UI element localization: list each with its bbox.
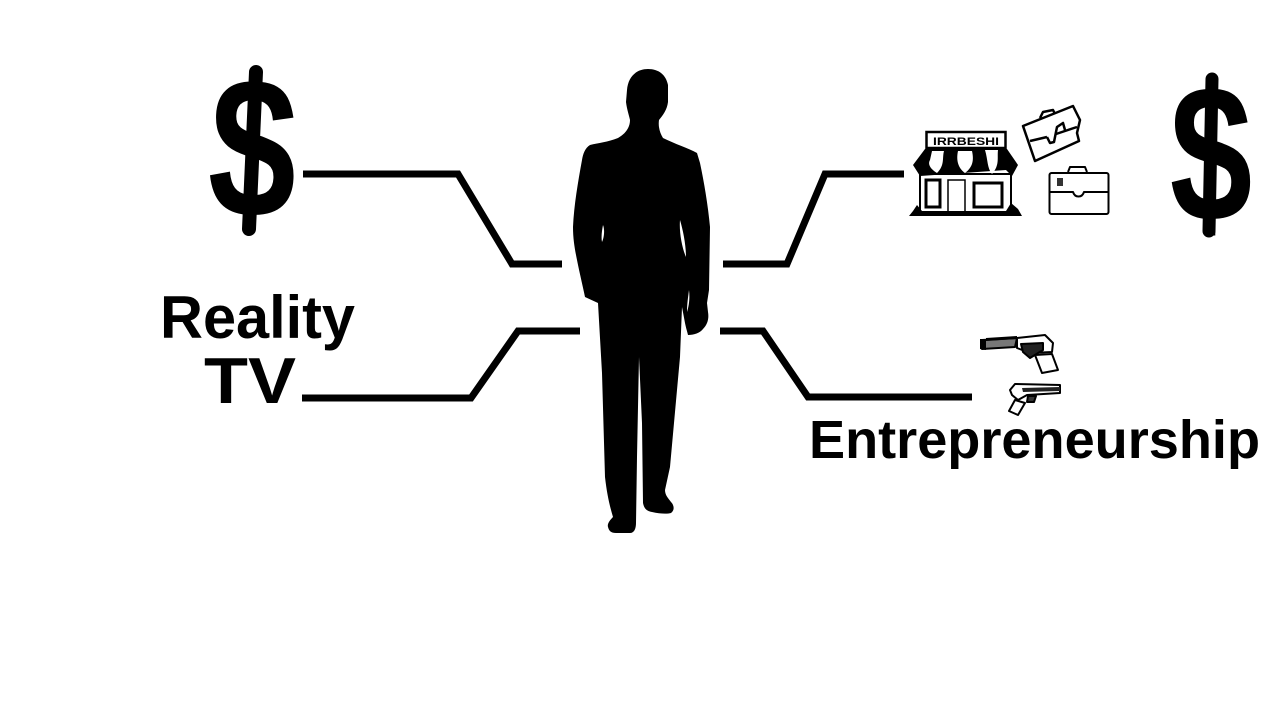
- icon: upper pistol: [980, 335, 1058, 373]
- heading: Reality TV: TV: [204, 344, 296, 417]
- heading: Reality TV: Reality: [160, 284, 356, 351]
- icon: storefront: [909, 132, 1022, 216]
- connector: dollar to person: [303, 174, 562, 264]
- connector: person to guns: [720, 331, 972, 397]
- icon: upright briefcase: [1050, 167, 1108, 214]
- icon: storefront: IRRBESHI: [933, 136, 999, 148]
- icon: left dollar sign: $: [204, 35, 302, 262]
- icon: person silhouette: [573, 69, 710, 533]
- icon: lower pistol: [1009, 384, 1060, 415]
- connector: reality TV to person: [302, 331, 580, 398]
- heading: Entrepreneurship: Entrepreneurship: [809, 410, 1260, 470]
- icon: tilted briefcase: [1023, 106, 1080, 161]
- heading: Reality TV: [160, 284, 356, 417]
- connector: person to business icons: [723, 174, 904, 264]
- icon: right dollar sign: $: [1170, 44, 1252, 263]
